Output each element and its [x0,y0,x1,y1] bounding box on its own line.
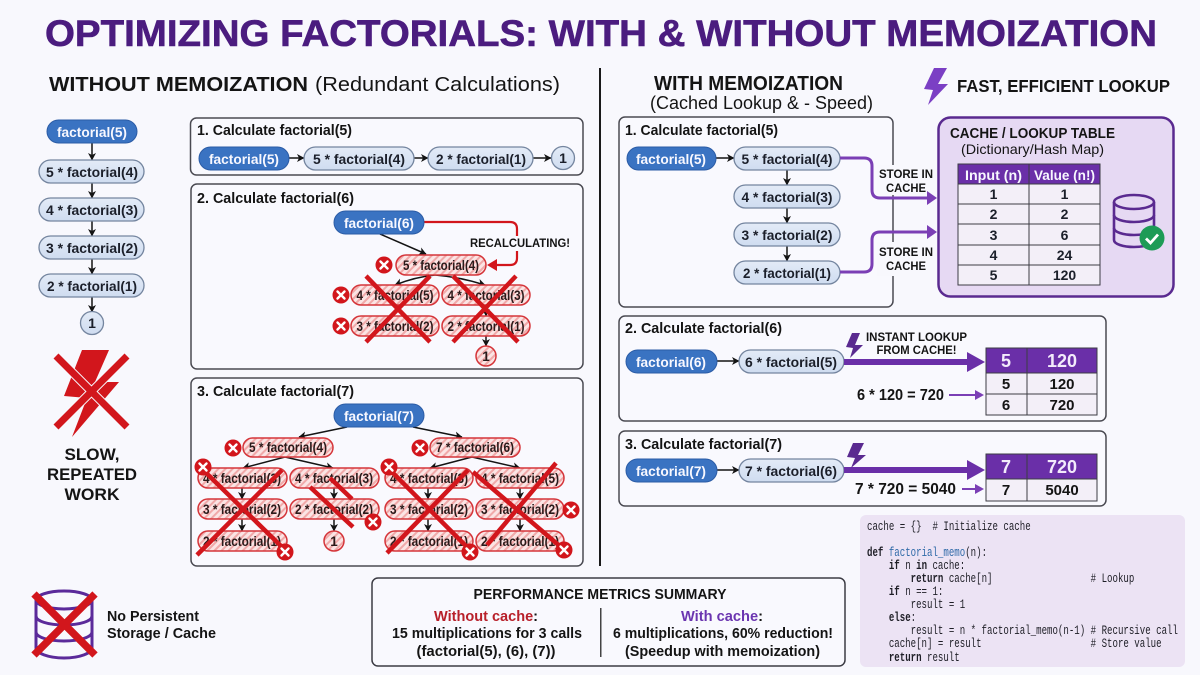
panel: without memo step 1: 1. Calculate factorial(5) [197,122,352,139]
heading: fast efficient lookup: FAST, EFFICIENT LOOKUP [957,76,1170,96]
panel: without memo step 3: 2 * factorial(2) [295,502,373,517]
panel: without memo step 2: 4 * factorial(3) [448,288,524,303]
mini table: factorial 7: 7 [1002,482,1010,499]
panel: without memo step 1: 5 * factorial(4) [313,151,405,167]
panel: cache lookup table: CACHE / LOOKUP TABLE [950,126,1115,142]
panel: without memo step 3: 4 * factorial(3) [203,471,281,486]
store in cache connectors: CACHE [886,181,926,195]
panel: without memo step 3: 4 * factorial(5) [481,471,559,486]
panel: cache lookup table [938,118,1174,296]
store in cache connectors: CACHE [886,259,926,273]
divider [599,68,601,566]
panel: python code: if n in cache: [867,560,965,574]
lookup table [958,164,1100,285]
panel: python code: result = 1 [867,599,966,613]
panel: without memo step 3: 2 * factorial(1) [481,534,559,549]
mini table: factorial 7: 7 [1001,457,1011,477]
mini table: factorial 6: 720 [1049,397,1075,414]
icon: fast lightning bolt [924,68,948,105]
panel: with memo step 2: FROM CACHE! [876,343,956,357]
lookup table: Value (n!) [1034,167,1095,183]
panel: with memo step 3 [619,431,1106,506]
panel: python code: result = n * factorial_memo(n-1) # Recursive call [867,625,1178,639]
panel: without memo step 1: 2 * factorial(1) [436,151,526,167]
mini table: factorial 6 [986,348,1097,415]
panel: with memo step 3: 7 * 720 = 5040 [855,481,956,498]
panel: performance metrics summary: PERFORMANCE METRICS SUMMARY [474,586,726,603]
panel: without memo step 3: 2 * factorial(1) [203,534,281,549]
store in cache connectors [840,158,937,276]
left call chain for factorial(5): 3 * factorial(2) [46,240,138,256]
panel: cache lookup table: (Dictionary/Hash Map) [961,141,1104,157]
mini table: factorial 6: 120 [1047,351,1077,371]
lookup table: 1 [1061,186,1069,202]
panel: with memo step 3: 3. Calculate factorial(7) [625,436,782,453]
panel: with memo step 1: 5 * factorial(4) [742,151,832,167]
mini table: factorial 6: 120 [1049,376,1075,393]
left call chain for factorial(5) [39,120,144,334]
panel: python code: cache = {} # Initialize cache [867,521,1031,535]
icon: crossed-out database [34,591,95,658]
heading: with memoization: (Cached Lookup & - Speed) [650,93,873,113]
panel: without memo step 1: 1 [559,150,567,166]
panel: with memo step 1 [619,117,893,307]
panel: with memo step 2: 2. Calculate factorial(6) [625,320,782,337]
panel: without memo step 2: 1 [482,349,490,364]
lookup table: 24 [1057,247,1072,263]
label: no persistent storage: No Persistent [107,608,199,625]
panel: python code: def factorial_memo(n): [867,547,987,561]
heading: without memoization [49,74,560,96]
panel: python code [860,515,1185,667]
panel: without memo step 2: 5 * factorial(4) [403,258,479,273]
lookup table: 120 [1053,267,1076,283]
left call chain for factorial(5): 1 [88,315,96,331]
panel: performance metrics summary [372,578,845,666]
panel: without memo step 3: 3 * factorial(2) [390,502,468,517]
panel: performance metrics summary: 6 multiplications, 60% reduction! [613,626,833,642]
panel: without memo step 3: 1 [330,534,338,549]
panel: with memo step 1: 2 * factorial(1) [743,265,831,281]
label: slow repeated work: SLOW, [64,445,120,464]
panel: without memo step 1 [190,118,583,175]
panel: with memo step 2: factorial(6) [636,354,706,370]
label: no persistent storage: Storage / Cache [107,625,216,642]
panel: without memo step 3: 4 * factorial(3) [295,471,373,486]
panel: without memo step 2: RECALCULATING! [470,236,570,250]
label: slow repeated work: WORK [64,485,120,504]
lookup table: 6 [1061,227,1069,243]
panel: without memo step 1: factorial(5) [209,151,279,167]
mini table: factorial 6: 6 [1002,397,1010,414]
panel: without memo step 3 [191,378,583,566]
panel: without memo step 3: 7 * factorial(6) [436,440,514,455]
lookup table: 5 [990,267,998,283]
left call chain for factorial(5): 2 * factorial(1) [47,278,137,294]
label: slow repeated work [47,445,137,504]
lookup table: 4 [990,247,998,263]
panel: with memo step 3: 7 * factorial(6) [745,463,837,479]
lookup table: 2 [1061,206,1069,222]
panel: without memo step 2 [191,184,583,369]
panel: with memo step 3: factorial(7) [636,463,706,479]
panel: performance metrics summary: 15 multiplications for 3 calls [392,626,582,642]
lookup table: 1 [990,186,998,202]
panel: performance metrics summary: Without cache: [434,608,538,625]
panel: with memo step 1: 1. Calculate factorial(5) [625,122,778,139]
panel: with memo step 1: factorial(5) [636,151,706,167]
mini table: factorial 7: 720 [1047,457,1077,477]
panel: without memo step 3: 5 * factorial(4) [249,440,327,455]
mini table: factorial 6: 5 [1001,351,1011,371]
panel: performance metrics summary: (factorial(5), (6), (7)) [416,644,556,660]
panel: without memo step 3: 3 * factorial(2) [481,502,559,517]
panel: python code: cache[n] = result # Store value [867,638,1162,652]
panel: without memo step 2: 4 * factorial(5) [356,288,434,303]
mini table: factorial 7 [986,454,1097,501]
panel: without memo step 3: 4 * factorial(3) [390,471,468,486]
label: slow repeated work: REPEATED [47,465,137,484]
mini table: factorial 6: 5 [1002,376,1010,393]
lookup table: 3 [990,227,998,243]
lookup table: 2 [990,206,998,222]
left call chain for factorial(5): 5 * factorial(4) [46,164,138,180]
heading: with memoization: WITH MEMOIZATION [654,73,843,95]
panel: without memo step 2: 3 * factorial(2) [356,319,434,334]
panel: without memo step 2: factorial(6) [344,215,414,231]
panel: without memo step 2: 2. Calculate factorial(6) [197,190,354,207]
icon: database with check [1114,195,1164,250]
panel: python code: else: [867,612,916,626]
panel: with memo step 1: 4 * factorial(3) [742,189,832,205]
mini table: factorial 7: 5040 [1045,482,1079,499]
panel: python code: return cache[n] # Lookup [867,573,1134,587]
heading: without memoization: (Redundant Calculations) [315,74,560,96]
panel: with memo step 1: 3 * factorial(2) [742,227,832,243]
panel: with memo step 2: 6 * factorial(5) [745,354,837,370]
panel: performance metrics summary: (Speedup with memoization) [625,644,820,660]
panel: without memo step 3: 3. Calculate factorial(7) [197,383,354,400]
panel: with memo step 2: 6 * 120 = 720 [857,387,944,404]
heading: with memoization [650,73,873,113]
panel: without memo step 3: factorial(7) [344,408,414,424]
icon: crossed-out slow bolt [56,350,127,437]
left call chain for factorial(5): 4 * factorial(3) [46,202,138,218]
panel: without memo step 3: 3 * factorial(2) [203,502,281,517]
title: OPTIMIZING FACTORIALS: WITH & WITHOUT MEMOIZATION [45,13,1157,54]
store in cache connectors: STORE IN [879,245,933,259]
panel: python code: if n == 1: [867,586,943,600]
left call chain for factorial(5): factorial(5) [57,124,127,140]
panel: performance metrics summary: With cache: [681,608,763,625]
store in cache connectors: STORE IN [879,167,933,181]
panel: python code: return result [867,652,960,666]
panel: with memo step 2 [619,316,1106,421]
lookup table: Input (n) [965,167,1022,183]
panel: without memo step 2: 2 * factorial(1) [448,319,524,334]
panel: with memo step 2: INSTANT LOOKUP [866,330,967,344]
heading: without memoization: WITHOUT MEMOIZATION [49,74,308,96]
label: no persistent storage [107,608,216,642]
panel: without memo step 3: 2 * factorial(1) [390,534,468,549]
